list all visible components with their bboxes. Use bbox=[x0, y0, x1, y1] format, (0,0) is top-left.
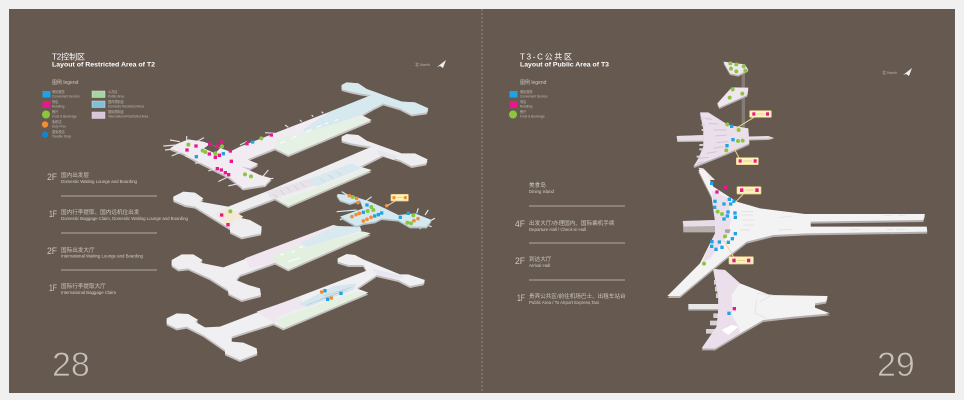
floor list T2: 1F bbox=[49, 283, 57, 294]
swatch: public area bbox=[92, 89, 124, 98]
markers bbox=[717, 188, 726, 192]
floor list T3: 出发大厅/办理国内、国际乘机手续 bbox=[529, 219, 615, 227]
floor list T3: Dining island bbox=[529, 189, 555, 194]
icon: retailing bbox=[42, 99, 65, 108]
icon: retailing: Retailing bbox=[52, 104, 65, 108]
swatch: international restricted: 国际限制区 bbox=[108, 109, 125, 114]
callout: upper right bbox=[735, 111, 771, 129]
legend T3: 图例 legend bbox=[520, 79, 547, 86]
north marker T2: 北 North bbox=[415, 61, 430, 67]
title: T2 bbox=[52, 52, 156, 68]
callout: upper bbox=[735, 187, 761, 203]
icon: taxable shop bbox=[42, 129, 72, 138]
markers bbox=[322, 292, 331, 298]
floor list T3: 4F bbox=[515, 219, 525, 230]
icon: food and beverage: Food & Beverage bbox=[52, 114, 77, 118]
floor list T2: 2F bbox=[47, 246, 57, 257]
floor list T3: 贵宾公共区/前往机场巴士、出租车站台 bbox=[529, 292, 626, 300]
icon: convenient service bbox=[510, 89, 548, 98]
map: T3 upper levels bbox=[677, 62, 774, 180]
map: T2 domestic 1F bbox=[173, 134, 428, 239]
markers bbox=[222, 215, 228, 225]
floor list T2 bbox=[47, 171, 189, 295]
floor list T2: 1F bbox=[49, 209, 57, 220]
page number 28: 28 bbox=[52, 346, 90, 384]
map: T2 domestic 2F bbox=[163, 82, 428, 190]
floor list T3: 美食岛 bbox=[529, 181, 546, 189]
icon: food and beverage bbox=[509, 109, 545, 118]
dining island top bbox=[723, 62, 748, 77]
floor list T2: International Waiting Lounge and Boarding bbox=[61, 254, 144, 258]
legend T3 bbox=[509, 79, 548, 118]
floor list T3: 2F bbox=[515, 256, 525, 267]
map: T2 international island bbox=[337, 192, 435, 229]
floor list T2: Domestic Baggage Claim, Domestic Waiting Lounge and Boarding bbox=[61, 216, 189, 221]
icon: taxable shop: Taxable Shop bbox=[52, 134, 72, 138]
north marker T3: 北 North bbox=[882, 69, 897, 75]
map: T2 international 1F bbox=[167, 254, 425, 362]
markers bbox=[187, 135, 271, 175]
markers bbox=[349, 196, 418, 221]
map: T2 international 2F bbox=[172, 225, 371, 302]
icon: food and beverage: 餐厅 bbox=[52, 109, 59, 114]
floor list T2: 国际行李提取大厅 bbox=[61, 282, 106, 290]
swatch: domestic restricted: Domestic Restricted Area bbox=[108, 104, 144, 108]
callout: duty free bbox=[387, 194, 408, 206]
icon: duty free: Duty Free bbox=[52, 124, 66, 128]
icon: convenient service bbox=[42, 89, 80, 98]
legend T2: 图例 legend bbox=[52, 79, 79, 86]
floor list T3: Arrival Hall bbox=[529, 263, 550, 268]
swatch: public area: 公共区 bbox=[108, 89, 118, 94]
floor list T3 bbox=[515, 181, 626, 305]
floor list T2: 国内行李提取、国内远机位出发 bbox=[61, 208, 140, 216]
piers bbox=[163, 112, 323, 189]
title: T3: Layout of Public Area of T3 bbox=[520, 62, 610, 68]
icon: food and beverage bbox=[42, 109, 77, 118]
icon: taxable shop: 直免税店 bbox=[52, 129, 65, 134]
swatch: domestic restricted bbox=[92, 99, 144, 108]
title: T3: T3-C公共区 bbox=[520, 52, 572, 62]
icon: convenient service: Convenient Service bbox=[520, 94, 548, 98]
north marker T2 bbox=[415, 60, 446, 68]
map: T3 1F public area bbox=[688, 269, 830, 350]
icon: retailing: 商店 bbox=[52, 99, 58, 104]
icon: food and beverage: 餐厅 bbox=[520, 109, 527, 114]
markers bbox=[729, 304, 739, 314]
icon: food and beverage: Food & Beverage bbox=[520, 114, 545, 118]
icon: retailing: 商店 bbox=[520, 99, 526, 104]
floor list T2: 国内出发层 bbox=[61, 171, 89, 179]
swatch: domestic restricted: 国内限制区 bbox=[108, 99, 125, 104]
icon: convenient service: 便民服务 bbox=[52, 89, 66, 94]
dining island lower bbox=[717, 87, 748, 109]
swatch: international restricted: International Restricted Area bbox=[108, 114, 148, 118]
callout: lower bbox=[723, 240, 753, 264]
swatch: public area: Public Area bbox=[108, 94, 124, 98]
north marker T3 bbox=[882, 68, 912, 76]
icon: retailing bbox=[510, 99, 533, 108]
floor list T2: 国际出发大厅 bbox=[61, 246, 95, 254]
callout: lower right bbox=[734, 148, 758, 165]
icon: duty free bbox=[42, 119, 66, 128]
floor list T3: 到达大厅 bbox=[529, 255, 552, 263]
title: T3 bbox=[520, 52, 610, 68]
floor list T2: Domestic Waiting Lounge and Boarding bbox=[61, 179, 138, 184]
page number 29: 29 bbox=[877, 346, 915, 384]
floor list T2: International Baggage Claim bbox=[61, 290, 116, 295]
title: T2: Layout of Restricted Area of T2 bbox=[52, 62, 156, 68]
icon: convenient service: Convenient Service bbox=[52, 94, 80, 98]
legend T2 bbox=[42, 79, 148, 138]
icon: convenient service: 便民服务 bbox=[520, 89, 534, 94]
floor list T3: Departure Hall / Check-in Hall bbox=[529, 227, 586, 232]
icon: retailing: Retailing bbox=[520, 104, 533, 108]
floor list T3: 1F bbox=[517, 293, 525, 304]
map: T3 4F departure hall bbox=[667, 170, 927, 298]
swatch: international restricted bbox=[92, 109, 148, 118]
floor list T2: 2F bbox=[47, 172, 57, 183]
title: T2: T2控制区 bbox=[52, 52, 85, 62]
icon: duty free: 免税店 bbox=[52, 119, 62, 124]
floor list T3: Public Area / To Airport Express,Taxi bbox=[529, 300, 599, 305]
departure wing bbox=[677, 112, 774, 180]
